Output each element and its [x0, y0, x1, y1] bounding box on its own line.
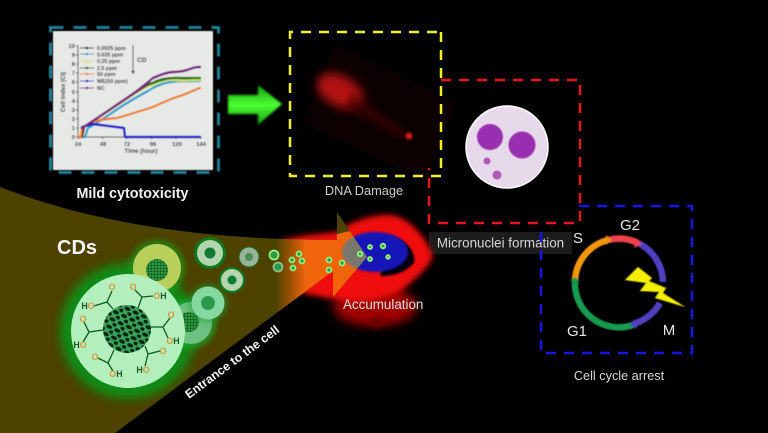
blue dashed frame	[541, 206, 692, 353]
chart legend	[80, 46, 128, 92]
label box: Micronuclei formation	[437, 236, 564, 250]
glow of large dot	[60, 263, 196, 399]
oxygen and hydroxyl labels: O	[130, 282, 137, 292]
x axis labels: 120	[172, 142, 182, 148]
label: Cell cycle arrest	[574, 369, 665, 383]
cell cycle ring	[570, 235, 663, 329]
label: entrance to the cell: Entrance to the cell	[182, 323, 282, 401]
y axis labels: 7	[72, 71, 75, 77]
x axis labels: 24	[75, 142, 82, 148]
chart background	[53, 31, 213, 170]
panel: micronuclei formation	[429, 80, 580, 254]
y axis labels: 9	[72, 53, 76, 59]
x axis labels: 48	[100, 142, 107, 148]
oxygen and hydroxyl labels	[73, 282, 180, 379]
core	[103, 305, 151, 353]
y axis labels: 6	[72, 80, 76, 86]
x axis title: Time (hour)	[125, 149, 157, 155]
y axis labels	[69, 44, 76, 141]
particle: medium yellow	[129, 240, 185, 296]
heading: mild cytotoxicity: Mild cytotoxicity	[76, 186, 189, 202]
CD delivery wedge and arrow	[0, 187, 367, 433]
comet assay image	[303, 45, 455, 180]
phase labels: G2	[620, 217, 640, 234]
CD concentration arrow: CD	[137, 57, 147, 64]
x axis labels	[75, 142, 207, 148]
y axis title: Cell Index (CI)	[61, 72, 67, 112]
y axis labels: 4	[72, 99, 76, 105]
particle: small top 2	[238, 246, 260, 268]
carbon dot particles	[60, 237, 260, 399]
chart legend: 0.025 ppm	[97, 52, 123, 58]
oxygen and hydroxyl labels: HO	[136, 365, 150, 375]
oxygen and hydroxyl labels: O	[92, 352, 99, 362]
y axis labels: 1	[72, 126, 76, 132]
particle: small mid	[219, 267, 245, 293]
phase labels: S	[573, 230, 583, 247]
oxygen and hydroxyl labels: OH	[153, 291, 167, 301]
oxygen and hydroxyl labels: O	[168, 310, 175, 320]
y axis labels: 2	[72, 117, 75, 123]
cell with red cytoplasm and blue nucleus	[283, 215, 433, 327]
oxygen and hydroxyl labels: O	[160, 346, 167, 356]
y axis labels: 0	[72, 135, 75, 141]
CD concentration arrow	[131, 45, 147, 74]
label: DNA Damage	[325, 183, 403, 198]
chart legend: WE(50 ppm)	[97, 79, 128, 85]
panel: cell cycle arrest	[541, 206, 692, 383]
carboxyl bonds	[83, 290, 170, 371]
chart dashed frame	[50, 28, 218, 172]
y axis labels: 5	[72, 90, 76, 96]
oxygen and hydroxyl labels: HO	[73, 340, 87, 350]
x axis labels: 96	[150, 142, 157, 148]
particle: small top 1	[194, 237, 226, 269]
panel: DNA damage	[290, 32, 455, 198]
oxygen and hydroxyl labels: HO	[81, 301, 95, 311]
label box	[429, 232, 572, 254]
phase labels	[567, 217, 675, 340]
chart legend: 0.0025 ppm	[97, 46, 126, 52]
particle: large carbon dot	[71, 274, 185, 388]
label: accumulation: Accumulation	[343, 297, 423, 312]
x axis labels: 72	[124, 142, 130, 148]
chart legend: 50 ppm	[97, 72, 116, 78]
phase labels: G1	[567, 323, 587, 340]
arrow: green	[228, 85, 282, 125]
particles entering the cell	[270, 244, 390, 272]
oxygen and hydroxyl labels: OH	[109, 369, 123, 379]
particle: overlapping green 1	[166, 298, 216, 348]
phase labels: M	[663, 322, 675, 339]
chart legend: 2.5 ppm	[97, 66, 117, 72]
y axis labels: 3	[72, 108, 76, 114]
chart legend: NC	[97, 86, 105, 92]
oxygen and hydroxyl labels: O	[80, 314, 87, 324]
heading: CDs: CDs	[57, 237, 97, 259]
lightning bolt	[625, 267, 685, 307]
y axis labels: 10	[69, 44, 75, 50]
red dashed frame	[429, 80, 580, 223]
particle: overlapping green 2	[189, 284, 227, 322]
chart axes and ticks	[76, 46, 201, 139]
panel: mild cytotoxicity chart	[50, 28, 218, 172]
oxygen and hydroxyl labels: OH	[166, 336, 180, 346]
binucleated cell	[466, 106, 548, 188]
orange overlap with cell	[278, 231, 367, 312]
chart legend: 0.25 ppm	[97, 59, 120, 65]
chart curves	[78, 67, 200, 137]
y axis labels: 8	[72, 62, 76, 68]
yellow dashed frame	[290, 32, 441, 176]
oxygen and hydroxyl labels: O	[109, 282, 116, 292]
x axis labels: 144	[196, 142, 207, 148]
